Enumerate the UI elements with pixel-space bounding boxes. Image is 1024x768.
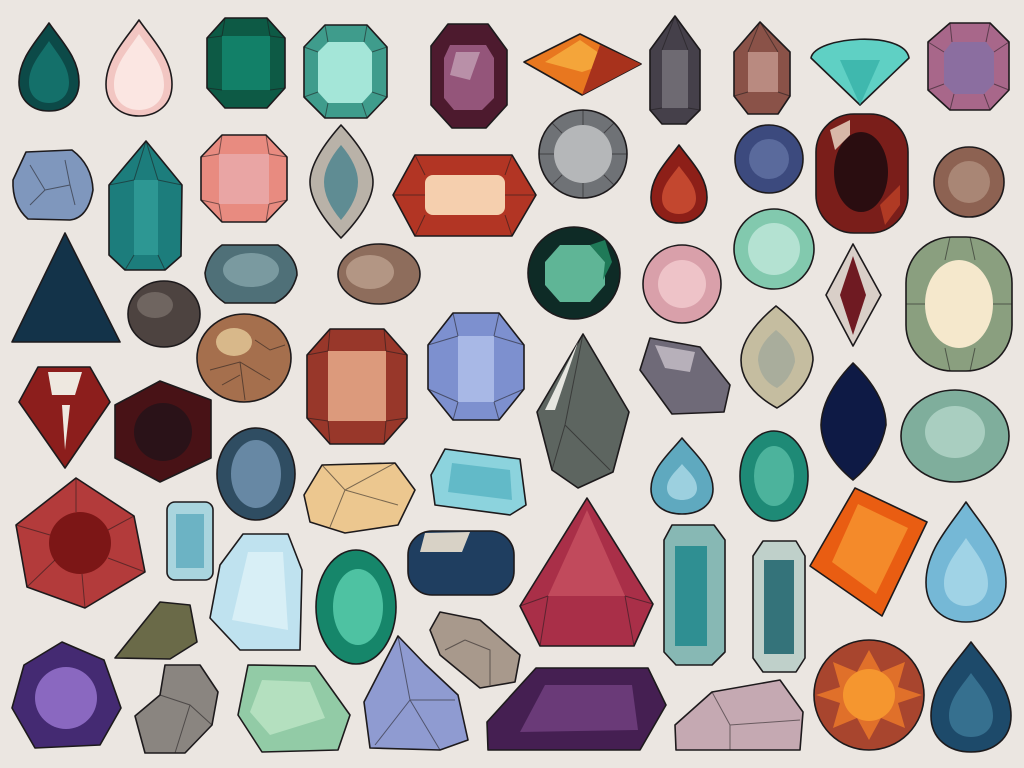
gem: navy marquise <box>821 363 886 480</box>
gem: mint round <box>734 209 814 289</box>
gem: dark grey crystal <box>650 16 700 124</box>
gem: grey rock <box>640 338 730 414</box>
gem: copper round <box>814 640 924 750</box>
gem: blue-grey rock <box>13 150 93 220</box>
gem: slate oval <box>217 428 295 520</box>
gem: periwinkle octagon <box>428 313 524 420</box>
gem: pale green rock <box>238 665 350 752</box>
gem: dark hexagon <box>115 381 211 482</box>
gem: mint octagon <box>304 25 387 118</box>
gem: dark red rounded <box>816 114 908 233</box>
gem: dark brown pebble <box>128 281 200 347</box>
gem: sage round <box>901 390 1009 482</box>
gem: teal tall rectangle <box>664 525 725 665</box>
gem: crimson crystal <box>520 498 653 646</box>
gem: brown round <box>934 147 1004 217</box>
gem: navy rounded rock <box>408 531 514 595</box>
gem: purple octagon <box>12 642 121 748</box>
gem: dark grey shard <box>537 334 629 488</box>
gem: olive rounded <box>906 237 1012 371</box>
gem: brown faceted rock <box>197 314 291 402</box>
gem: dark teal drop <box>19 23 79 111</box>
gem: dark teal tall rectangle <box>753 541 805 672</box>
gem: green emerald <box>207 18 285 108</box>
gem: aqua tablet <box>431 449 526 515</box>
gem: red diamond <box>19 367 110 468</box>
gem: brown crystal <box>734 22 790 114</box>
gem: blue faceted drop <box>926 502 1006 622</box>
gem: green faceted oval <box>316 550 396 664</box>
gem: navy triangle <box>12 233 120 342</box>
gem: maroon kite <box>826 244 881 346</box>
gem: grey marquise <box>310 125 373 238</box>
gem: teal oval <box>740 431 808 521</box>
gem: aqua small rectangle <box>167 502 213 580</box>
gem: taupe rock <box>430 612 520 688</box>
gem: maroon rounded <box>431 24 507 128</box>
gem: purple long crystal <box>487 668 666 750</box>
gem: khaki oval <box>741 306 813 408</box>
gem: dark green round <box>528 227 620 319</box>
gem: orange kite <box>524 34 641 95</box>
gem: pink drop <box>106 20 172 116</box>
gem: grey rubble <box>135 665 218 753</box>
gem: periwinkle rock <box>364 636 468 750</box>
gem: mauve rock <box>675 680 803 750</box>
gem: ice crystal <box>210 534 302 650</box>
gem: grey round <box>539 110 627 198</box>
gem: teal crystal <box>109 141 182 270</box>
gem: brown oval <box>338 244 420 304</box>
gem: blue egg drop <box>651 438 713 514</box>
gem: mauve octagon <box>928 23 1009 110</box>
gem: indigo round <box>735 125 803 193</box>
gem: slate rock <box>205 245 297 303</box>
gem: pink round <box>643 245 721 323</box>
gem: navy drop <box>931 642 1011 752</box>
gem: red drop <box>651 145 707 223</box>
gem: copper octagon <box>307 329 407 444</box>
gem: turquoise fan <box>811 39 909 105</box>
gem: sand rock <box>304 463 415 533</box>
gem: red long hexagon <box>393 155 536 236</box>
gem: red pentagon <box>16 478 145 608</box>
gem: pink octagon <box>201 135 287 222</box>
gem: orange quad <box>810 488 927 616</box>
gem: olive pebble <box>115 602 197 659</box>
